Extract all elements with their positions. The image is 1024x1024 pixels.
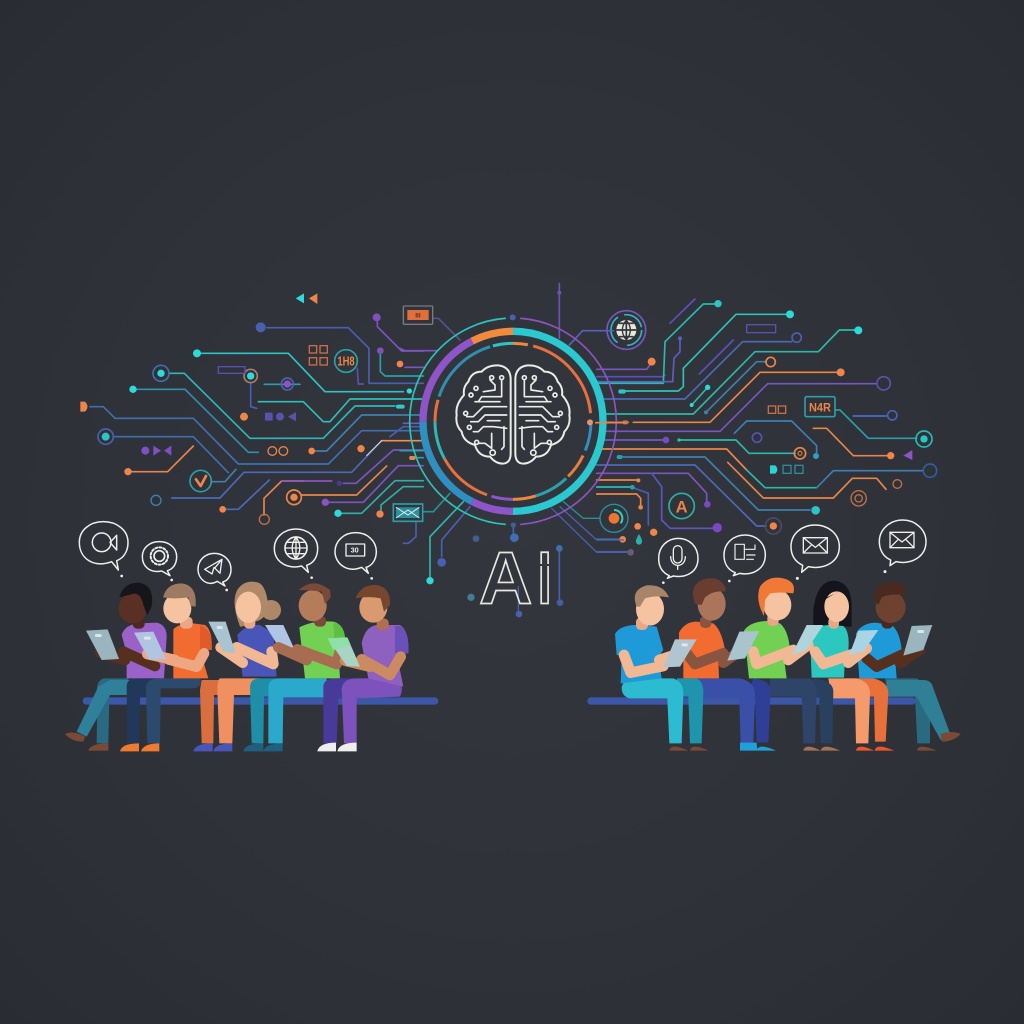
speech bubble: media: 30	[351, 546, 359, 555]
person 3	[193, 582, 297, 751]
speech bubble: envelope 2	[879, 520, 926, 573]
inner segmented ring	[435, 343, 591, 499]
icon: N4R badge: N4R	[809, 400, 831, 414]
center nodes	[426, 291, 627, 617]
brain left hemisphere	[456, 365, 511, 464]
bench right	[587, 697, 916, 705]
icon: envelope tag	[393, 504, 423, 521]
speech bubble: paper plane	[198, 553, 231, 591]
nodes right	[617, 300, 937, 556]
speech bubble: envelope	[791, 525, 839, 580]
person 5	[317, 585, 408, 751]
outer thin ring	[410, 318, 616, 525]
icon: orange square pair	[768, 406, 786, 413]
right audience group	[587, 520, 961, 751]
icon: check badge	[190, 470, 211, 492]
person 3 right	[744, 578, 840, 751]
icon: top left orange tag	[403, 306, 433, 324]
icon: A badge	[669, 493, 694, 519]
left audience group	[65, 522, 438, 751]
icon: 1H8 badge	[335, 350, 357, 372]
speech bubble: devices	[724, 535, 765, 582]
person 4 right	[810, 581, 894, 751]
icon: cyan square row	[770, 465, 803, 474]
central brain and rings	[393, 283, 627, 619]
icon: muted media controls	[265, 412, 296, 421]
connector lines and nodes	[400, 283, 627, 613]
speech bubble: globe	[274, 529, 318, 579]
icon: target ring	[600, 504, 628, 532]
person 1 right	[615, 585, 709, 751]
right circuit network	[597, 299, 937, 556]
icon: globe badge	[607, 311, 646, 349]
icon: top left orange tag: III	[415, 312, 421, 319]
center cover disc	[422, 331, 604, 512]
icon: 1H8 badge: 1H8	[337, 355, 355, 369]
speech bubble: video	[79, 522, 128, 577]
person 2	[120, 583, 212, 751]
bench left	[83, 697, 438, 705]
AI wordmark: AI	[479, 536, 555, 619]
thick segmented ring	[423, 331, 603, 511]
nodes left	[80, 313, 415, 524]
person 4	[243, 583, 345, 751]
icon: A badge: A	[676, 497, 688, 516]
icon: circuit brain	[456, 365, 570, 464]
person 1	[65, 583, 167, 751]
icon: N4R badge	[805, 397, 835, 417]
left circuit network	[80, 293, 423, 524]
brain right hemisphere	[515, 365, 570, 464]
person 2 right	[679, 578, 776, 751]
speech bubble: media	[335, 533, 376, 580]
icon: left triangles	[296, 293, 317, 304]
speech bubble: settings	[142, 542, 177, 581]
speech bubble: microphone	[659, 538, 698, 584]
person 5 right	[856, 582, 961, 751]
icon: purple media controls	[141, 446, 171, 456]
icon: orange squares	[309, 346, 327, 365]
